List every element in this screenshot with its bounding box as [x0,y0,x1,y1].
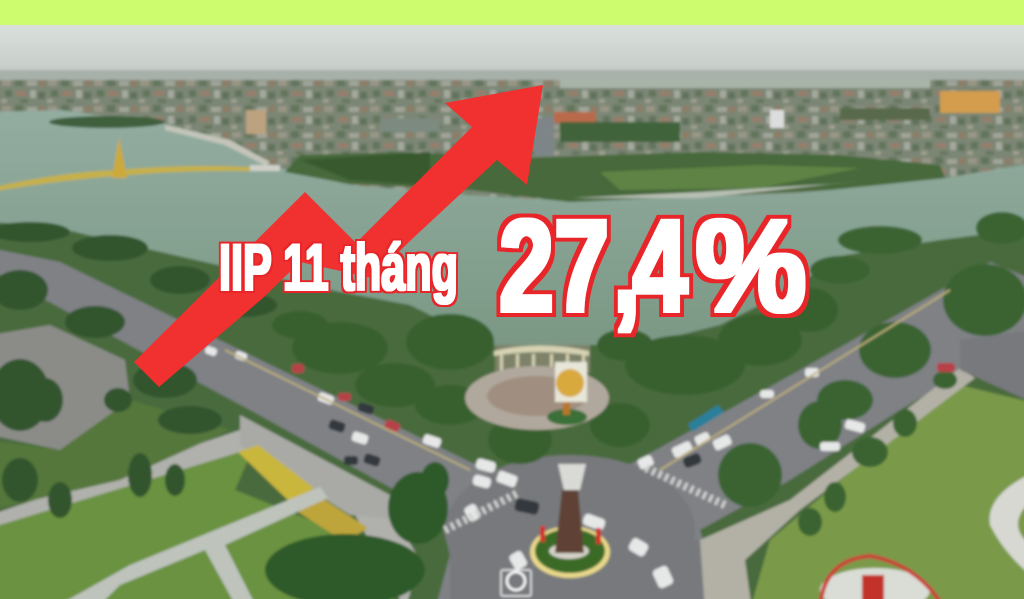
trees lower left [265,462,449,599]
road: main diagonal avenue [0,248,1024,599]
yellow flower bed [238,445,314,505]
wooded island peninsula [285,152,945,202]
shore promenade [165,125,270,166]
pergola colonnade [494,345,590,373]
label: IIP 11 tháng: IIP 11 tháng [219,230,458,304]
pavement along left road [0,430,420,599]
headline value: 27,4%: 27,4 [499,192,688,339]
left car park [0,325,130,450]
left green strip with palms [0,400,230,510]
headline value: 27,4% [499,192,807,340]
far shore islet [49,116,165,128]
tree belt centre [272,288,838,464]
left lawn footpath [50,487,328,599]
crosswalks [646,468,725,505]
left lawn [0,435,400,599]
lake [0,110,1024,345]
tree belt right [718,212,1024,536]
distant town on the far shore [0,70,1024,200]
central lane marking [225,290,950,470]
photographer watermark [501,570,531,596]
foreground base ground [0,190,1024,599]
tree belt left [0,222,277,518]
top green band [0,0,1024,25]
right footpath [700,368,975,599]
road: lower centre junction [445,455,695,599]
right lawn [750,385,1024,599]
sky [0,15,1024,77]
right road extension [960,330,1024,403]
plaza emblem monument [547,362,587,425]
circular plaza [465,366,609,430]
buses and cars [204,345,955,589]
paved plaza beside road [240,415,400,520]
red decorated monument bottom right [820,556,945,599]
roundabout tower and flower bed [530,464,610,578]
headline value: 27,4%: % [695,194,807,340]
red rising arrow [134,85,543,387]
golden bridge and tower [0,137,280,192]
